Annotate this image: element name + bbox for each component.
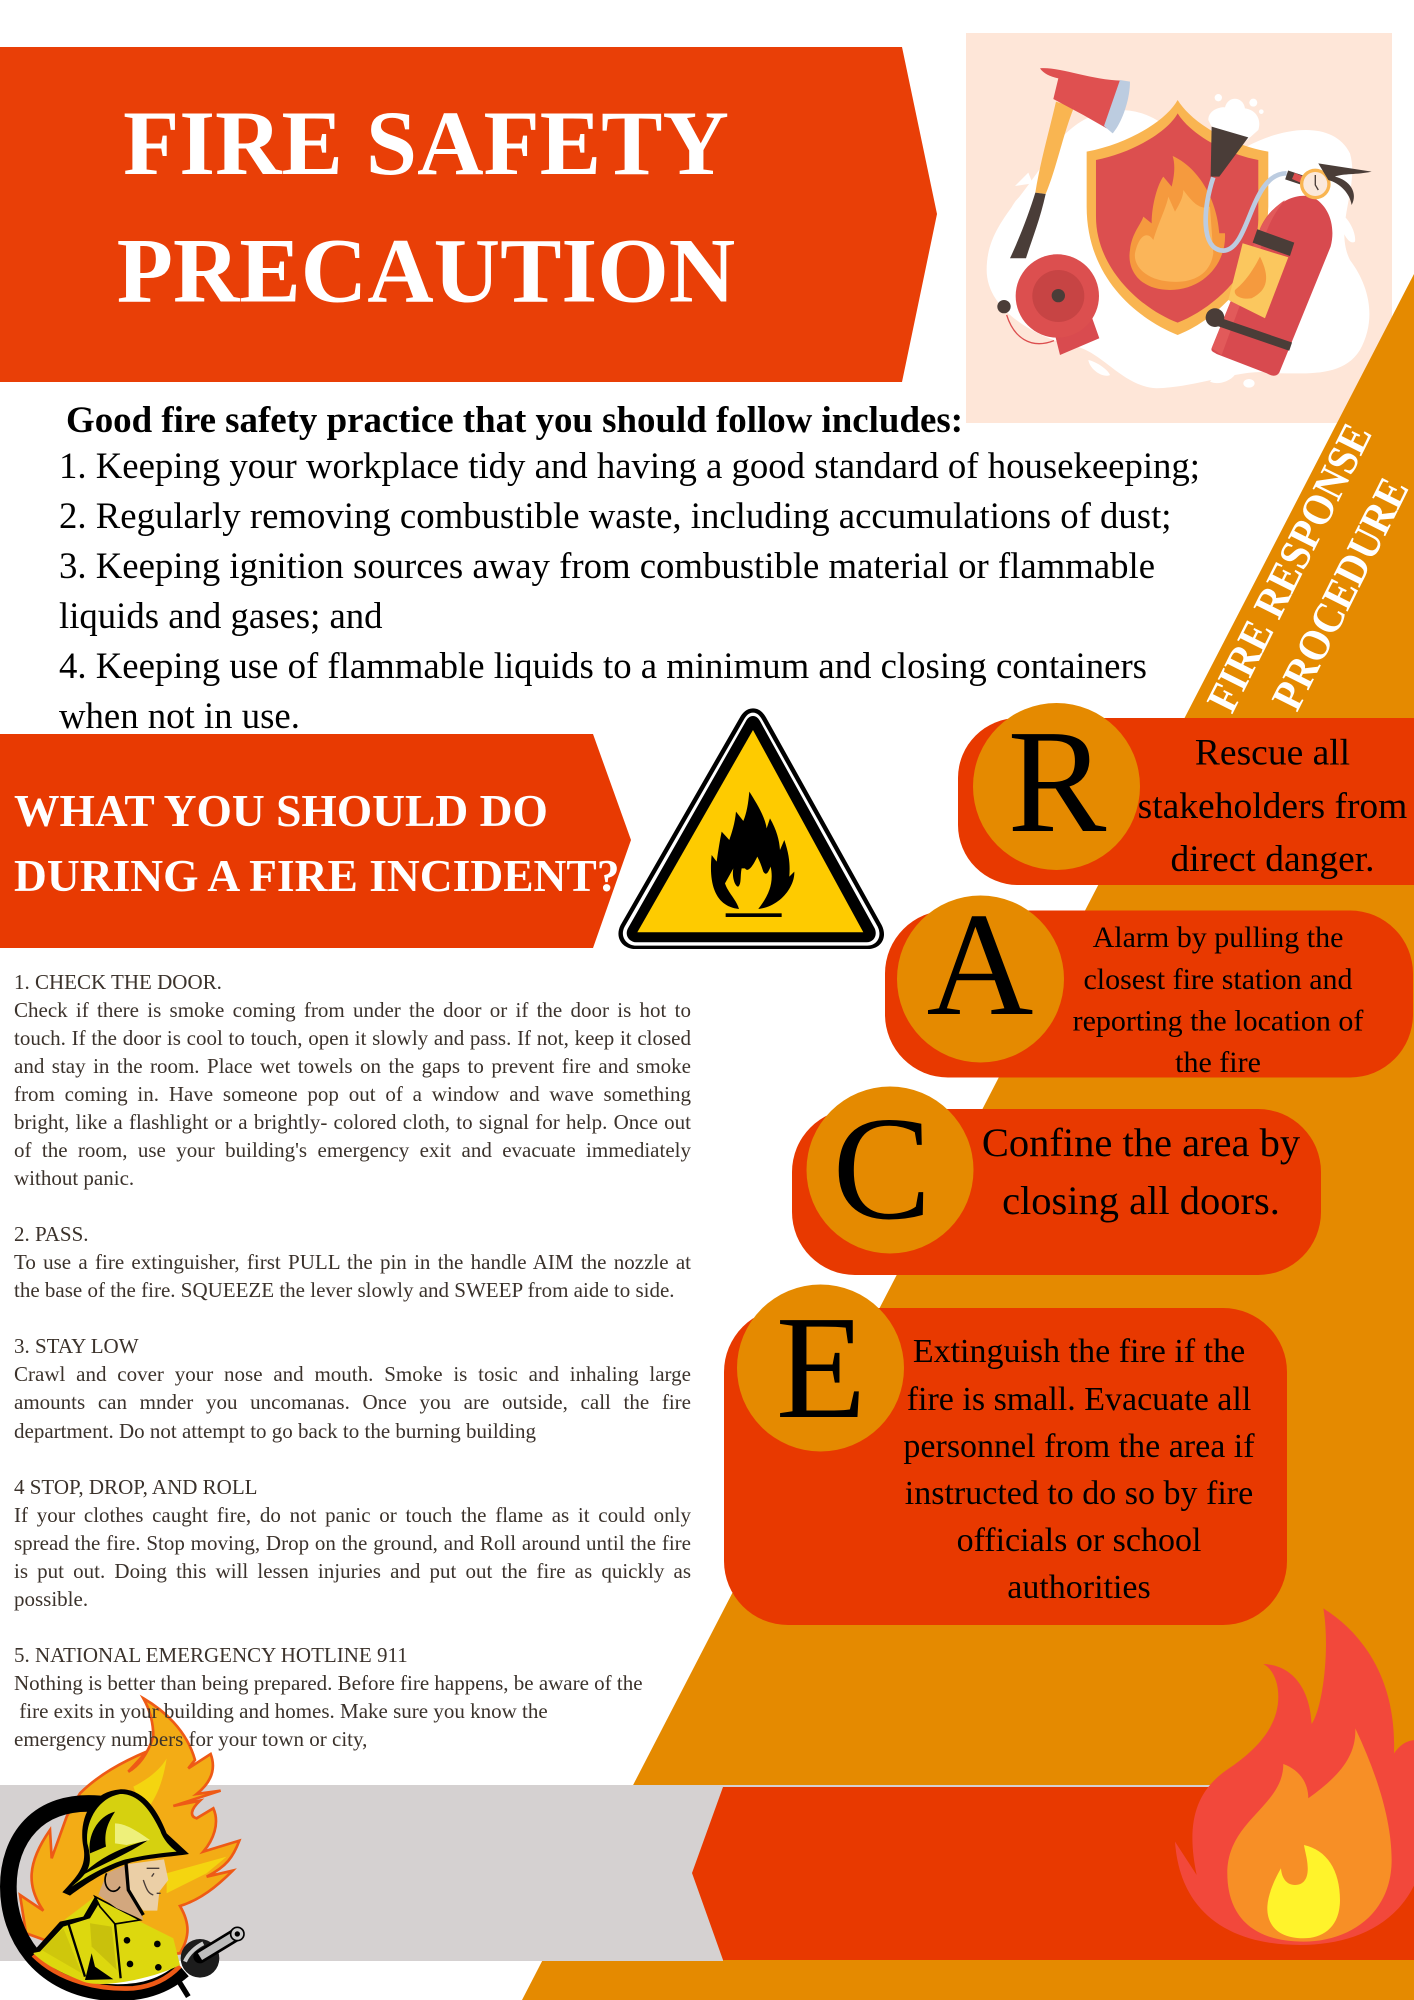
steps text block: If your clothes caught fire, do not panic or touch the flame as it could only — [14, 1503, 691, 1527]
heading banner: what you should do: WHAT YOU SHOULD DO — [14, 785, 548, 836]
intro list: 4. Keeping use of flammable liquids to a minimum and closing containers — [59, 644, 1147, 686]
RACE step E — [724, 1284, 1287, 1625]
intro list: 2. Regularly removing combustible waste, including accumulations of dust; — [59, 494, 1172, 536]
intro list: 3. Keeping ignition sources away from combustible material or flammable — [59, 544, 1155, 586]
icon: flammable warning triangle — [618, 708, 884, 949]
steps text block: 3. STAY LOW — [14, 1334, 139, 1358]
RACE step A: reporting the location of — [1073, 1004, 1363, 1038]
heading banner: what you should do: DURING A FIRE INCIDENT? — [14, 850, 620, 901]
footer red band — [692, 1787, 1414, 1960]
icon: firefighter with hose — [8, 1698, 244, 1997]
intro list: 1. Keeping your workplace tidy and having a good standard of housekeeping; — [59, 444, 1200, 486]
RACE step E: fire is small. Evacuate all — [907, 1381, 1251, 1418]
steps text block: from coming in. Have someone pop out of a window and wave something — [14, 1082, 691, 1106]
RACE step R: Rescue all — [1195, 732, 1350, 774]
RACE step E: Extinguish the fire if the — [913, 1333, 1245, 1370]
steps text block: possible. — [14, 1587, 88, 1611]
steps text block: To use a fire extinguisher, first PULL the pin in the handle AIM the nozzle at — [14, 1250, 691, 1274]
steps text block: and stay in the room. Place wet towels on the gaps to prevent fire and smoke — [14, 1054, 691, 1078]
RACE step C — [792, 1086, 1321, 1275]
steps text block: 4 STOP, DROP, AND ROLL — [14, 1475, 258, 1499]
steps text block: spread the fire. Stop moving, Drop on the ground, and Roll around until the fire — [14, 1531, 691, 1555]
RACE step R — [958, 700, 1414, 885]
RACE step A: the fire — [1175, 1046, 1261, 1079]
RACE step E: authorities — [1007, 1569, 1151, 1606]
steps text block: touch. If the door is cool to touch, open it slowly and pass. If not, keep it closed — [14, 1026, 691, 1050]
RACE step E: personnel from the area if — [903, 1428, 1255, 1465]
steps text block: department. Do not attempt to go back to the burning building — [14, 1418, 536, 1442]
steps text block: of the room, use your building's emergency exit and evacuate immediately — [14, 1138, 691, 1162]
RACE step C: closing all doors. — [1002, 1178, 1280, 1223]
intro list: when not in use. — [59, 694, 300, 736]
steps text block: 1. CHECK THE DOOR. — [14, 970, 222, 994]
RACE step A: A — [927, 883, 1033, 1047]
RACE step A — [885, 883, 1413, 1079]
steps text block: Nothing is better than being prepared. Before fire happens, be aware of the — [14, 1671, 643, 1695]
steps text block: is put out. Doing this will lessen injuries and put out the fire as quickly as — [14, 1559, 691, 1583]
RACE step A: closest fire station and — [1083, 963, 1353, 996]
steps text block: 2. PASS. — [14, 1222, 89, 1246]
diagonal orange background shape — [522, 274, 1414, 2000]
title banner: PRECAUTION — [117, 220, 735, 322]
intro heading: Good fire safety practice that you should follow includes: — [66, 399, 963, 440]
steps text block: Check if there is smoke coming from under the door or if the door is hot to — [14, 998, 691, 1022]
steps text block: Crawl and cover your nose and mouth. Smoke is tosic and inhaling large — [14, 1362, 691, 1386]
steps text block: emergency numbers for your town or city, — [14, 1727, 367, 1751]
RACE step E: instructed to do so by fire — [905, 1475, 1253, 1512]
RACE step E: E — [776, 1286, 866, 1450]
RACE step A: Alarm by pulling the — [1093, 921, 1343, 954]
illustration: fire safety equipment on peach panel — [966, 33, 1392, 423]
rotated heading: fire response procedure: FIRE RESPONSE — [1197, 416, 1382, 719]
title banner — [0, 47, 937, 382]
RACE step E: officials or school — [957, 1522, 1201, 1559]
steps text block: 5. NATIONAL EMERGENCY HOTLINE 911 — [14, 1643, 408, 1667]
RACE step R: direct danger. — [1170, 839, 1375, 880]
footer gray band — [0, 1785, 1300, 1961]
steps text block: the base of the fire. SQUEEZE the lever slowly and SWEEP from aide to side. — [14, 1278, 675, 1302]
steps text block: fire exits in your building and homes. Make sure you know the — [19, 1699, 548, 1723]
RACE step C: C — [833, 1087, 931, 1251]
intro list — [59, 444, 1200, 736]
RACE step R: R — [1008, 700, 1107, 864]
steps text block: bright, like a flashlight or a brightly- colored cloth, to signal for help. Once out — [14, 1110, 691, 1134]
RACE step C: Confine the area by — [982, 1120, 1301, 1165]
steps text block: without panic. — [14, 1166, 134, 1190]
intro list: liquids and gases; and — [59, 594, 383, 636]
heading banner: what you should do — [0, 734, 631, 948]
steps text block — [14, 970, 691, 1751]
icon: flame — [1175, 1608, 1414, 1945]
intro text block — [59, 399, 1200, 736]
title banner: FIRE SAFETY — [123, 92, 729, 194]
RACE step R: stakeholders from — [1138, 786, 1407, 827]
steps text block: amounts can mnder you uncomanas. Once you are outside, call the fire — [14, 1390, 691, 1414]
